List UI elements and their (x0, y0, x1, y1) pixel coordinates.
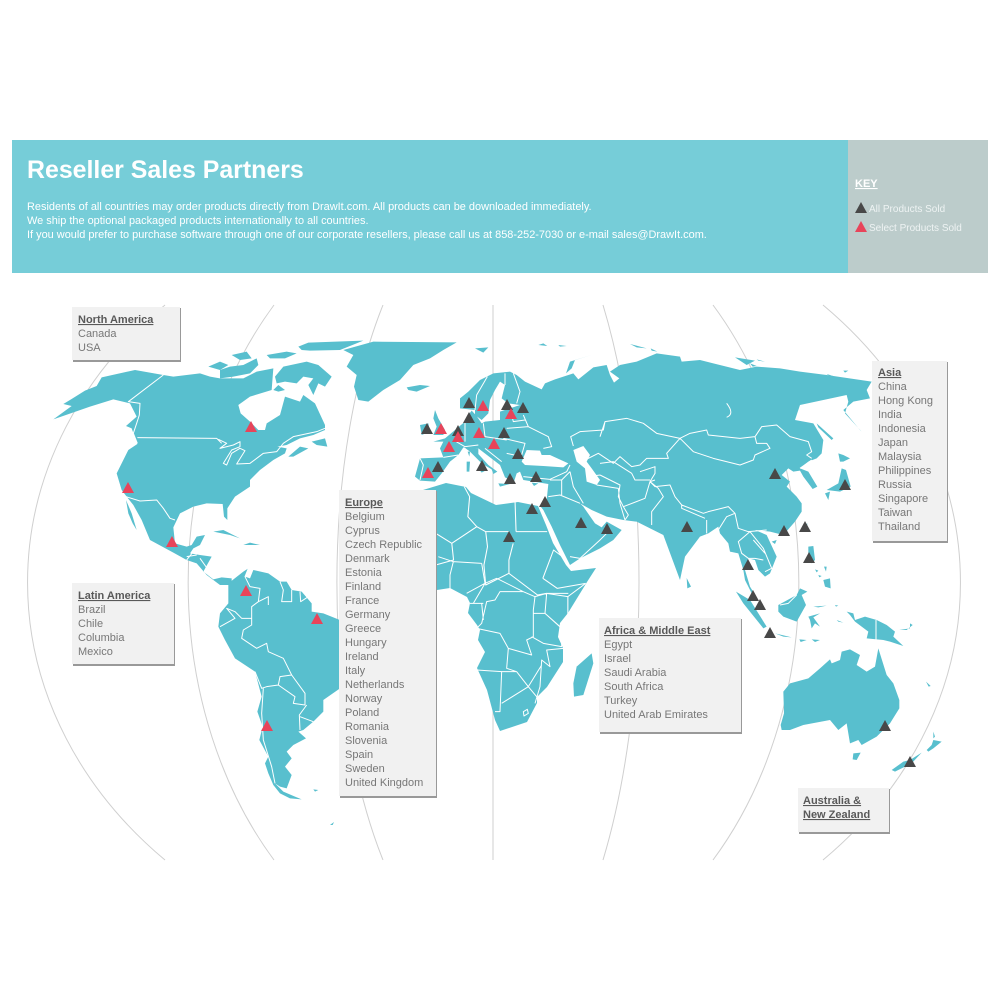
world map (53, 341, 942, 825)
panel: Australia and New Zealand (798, 788, 890, 834)
panel: Asia: Asia (878, 367, 902, 379)
panel: Asia: Hong Kong (878, 395, 933, 407)
panel: Europe (339, 490, 437, 798)
Africa (400, 483, 596, 731)
panel: Asia: Taiwan (878, 507, 912, 519)
panel: Latin America: Mexico (78, 646, 113, 658)
key panel: All Products Sold (869, 204, 945, 215)
North America, Greenland, Central America (53, 341, 488, 585)
key panel: Select Products Sold (869, 223, 962, 234)
intro text: If you would prefer to purchase software through one of our corporate resellers, please call us at 858-252-7030 or e-mail sales@DrawIt.com. (27, 229, 707, 241)
intro text (27, 201, 707, 241)
panel: Africa and Middle East: Turkey (604, 695, 638, 707)
panel: Latin America: Latin America (78, 590, 151, 602)
intro text: We ship the optional packaged products internationally to all countries. (27, 215, 368, 227)
panel: Latin America: Chile (78, 618, 103, 630)
title: Reseller Sales Partners (27, 156, 304, 184)
panel: Asia: India (878, 409, 903, 421)
panel: Asia: Indonesia (878, 423, 927, 435)
panel: Europe: United Kingdom (345, 777, 423, 789)
panel: Europe: Spain (345, 749, 373, 761)
key panel: KEY (855, 178, 878, 190)
panel: Latin America: Columbia (78, 632, 125, 644)
North Africa borders (436, 487, 586, 620)
panel: Africa and Middle East: South Africa (604, 681, 664, 693)
panel: Asia: Thailand (878, 521, 920, 533)
panel: Africa and Middle East: Israel (604, 653, 631, 665)
panel: Europe: Denmark (345, 553, 390, 565)
location markers: all products sold (421, 397, 916, 767)
panel: Asia (872, 361, 948, 543)
inland seas (522, 446, 600, 485)
panel: Europe: Slovenia (345, 735, 388, 747)
panel: Europe: Finland (345, 581, 381, 593)
panel: Asia: Japan (878, 437, 908, 449)
panel: Australia and New Zealand: Australia & (803, 795, 861, 807)
panel: Africa and Middle East: Egypt (604, 639, 632, 651)
panel: Asia: Philippines (878, 465, 932, 477)
panel: Europe: Ireland (345, 651, 379, 663)
panel: Europe: Netherlands (345, 679, 405, 691)
panel: Europe: Greece (345, 623, 381, 635)
panel: Europe: France (345, 595, 379, 607)
panel: Europe: Cyprus (345, 525, 380, 537)
panel: Asia: Russia (878, 479, 913, 491)
panel: Africa and Middle East: United Arab Emirates (604, 709, 708, 721)
Africa borders and Madagascar (438, 557, 593, 716)
panel: Asia: China (878, 381, 908, 393)
panel: Europe: Hungary (345, 637, 387, 649)
panel: Asia: Singapore (878, 493, 928, 505)
panel: Europe: Europe (345, 497, 383, 509)
panel: Europe: Germany (345, 609, 391, 621)
header banner (12, 140, 848, 273)
panel: North America: Canada (78, 328, 117, 340)
panel: North America (72, 307, 181, 362)
panel: Europe: Estonia (345, 567, 383, 579)
panel: Africa and Middle East: Africa & Middle East (604, 625, 711, 637)
globe grid lines (28, 305, 960, 860)
Australia and Oceania (781, 612, 942, 772)
panel: Europe: Italy (345, 665, 366, 677)
panel: North America: USA (78, 342, 101, 354)
panel: Australia and New Zealand: New Zealand (803, 809, 870, 821)
location markers: select products sold (122, 400, 517, 731)
panel: Latin America (72, 583, 175, 666)
panel: North America: North America (78, 314, 154, 326)
panel: Africa and Middle East (599, 618, 742, 734)
panel: Europe: Belgium (345, 511, 385, 523)
panel: Asia: Malaysia (878, 451, 922, 463)
panel: Africa and Middle East: Saudi Arabia (604, 667, 667, 679)
panel: Europe: Romania (345, 721, 390, 733)
panel: Europe: Poland (345, 707, 379, 719)
panel: Europe: Sweden (345, 763, 385, 775)
Eurasia (415, 343, 872, 637)
panel: Latin America: Brazil (78, 604, 106, 616)
intro text: Residents of all countries may order products directly from DrawIt.com. All products can be downloaded immediately. (27, 201, 592, 213)
panel: Europe: Norway (345, 693, 383, 705)
key panel (848, 140, 988, 273)
panel: Europe: Czech Republic (345, 539, 423, 551)
South America (218, 568, 367, 825)
